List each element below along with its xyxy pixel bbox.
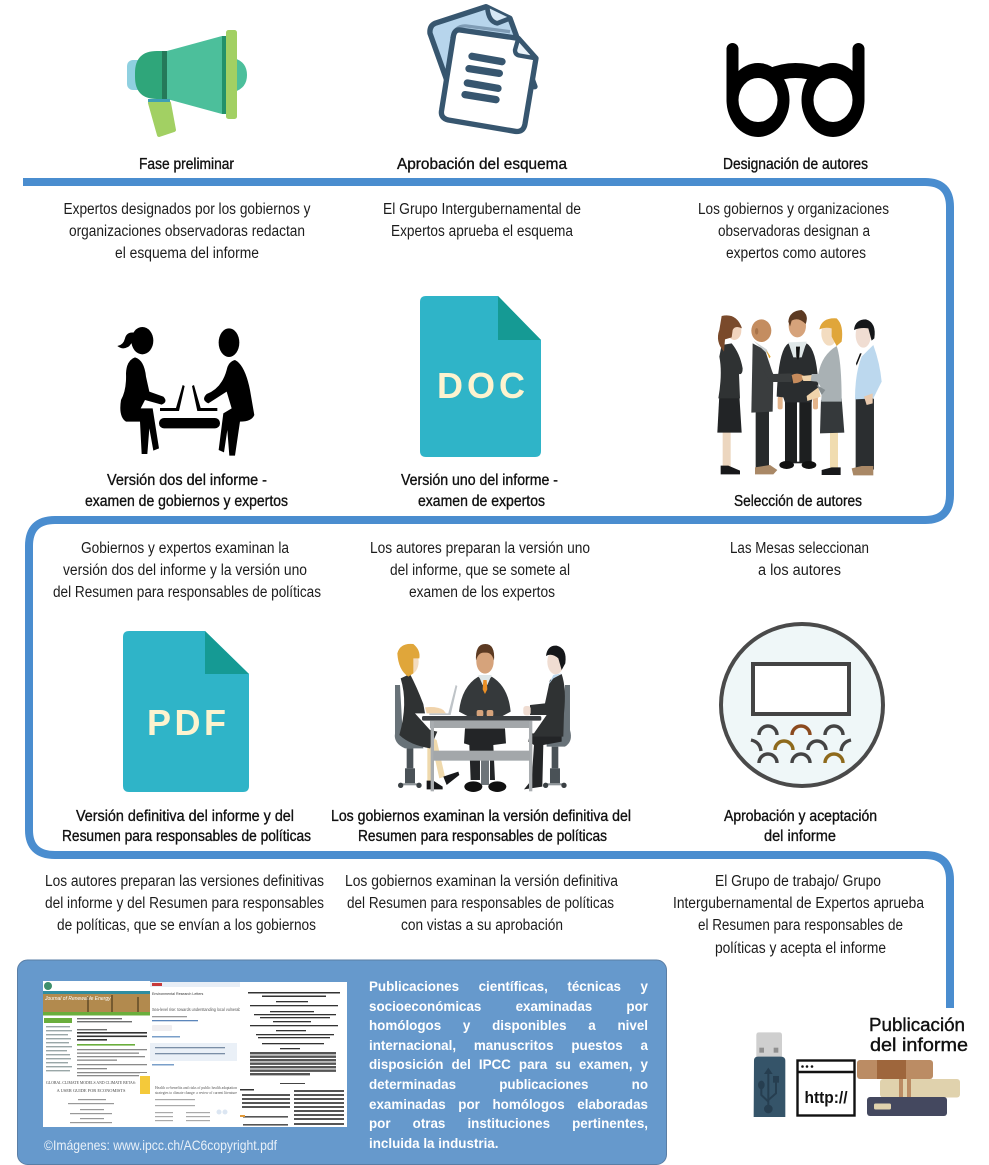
descriptions row 1: expertos como autores <box>726 245 866 262</box>
descriptions row 3: de políticas, que se envían a los gobiernos <box>57 917 316 934</box>
descriptions row 1 <box>64 201 889 262</box>
heading row 2: examen de expertos <box>418 493 545 510</box>
text block: publications description: homólogos y disponibles a nivel <box>369 1018 648 1033</box>
heading row 3: Resumen para responsables de políticas <box>62 828 311 845</box>
heading row 2: examen de gobiernos y expertos <box>85 493 288 510</box>
descriptions row 1: Expertos designados por los gobiernos y <box>64 201 311 218</box>
text block: publications description: socioeconómicas examinadas por <box>369 999 648 1014</box>
descriptions row 2: del Resumen para responsables de políticas <box>53 584 321 601</box>
descriptions row 3: con vistas a su aprobación <box>401 917 563 934</box>
icon: DOC file <box>420 296 541 457</box>
heading row 3: Aprobación y aceptación <box>724 808 877 825</box>
icon: group of authors <box>717 310 882 475</box>
heading: publication of the report: Publicación <box>869 1014 965 1035</box>
image collage: publication screenshots: A USER GUIDE FOR ECONOMISTS <box>57 1088 126 1093</box>
descriptions row 1: Expertos aprueba el esquema <box>391 223 573 240</box>
image collage: publication screenshots: Journal of Renewable Energy <box>44 996 111 1002</box>
descriptions row 1: organizaciones observadoras redactan <box>69 223 305 240</box>
heading row 3 <box>62 808 877 845</box>
image collage: publication screenshots: Sea-level rise: towards understanding local vulnerability <box>152 1007 247 1012</box>
descriptions row 1: El Grupo Intergubernamental de <box>383 201 581 218</box>
heading row 3: del informe <box>764 828 836 845</box>
image collage: publication screenshots: GLOBAL CLIMATE MODELS AND CLIMATE BETAS: <box>46 1080 136 1085</box>
descriptions row 3: Los autores preparan las versiones definitivas <box>45 873 324 890</box>
descriptions row 2: Los autores preparan la versión uno <box>370 540 590 557</box>
icon: USB stick <box>754 1032 785 1117</box>
descriptions row 3 <box>45 873 924 957</box>
descriptions row 3: El Grupo de trabajo/ Grupo <box>715 873 881 890</box>
heading row 3: Los gobiernos examinan la versión definitiva del <box>331 808 631 825</box>
descriptions row 1: observadoras designan a <box>718 223 870 240</box>
descriptions row 2: a los autores <box>758 562 841 579</box>
descriptions row 3: políticas y acepta el informe <box>715 940 886 957</box>
descriptions row 2: examen de los expertos <box>409 584 555 601</box>
image credit: ©Imágenes: www.ipcc.ch/AC6copyright.pdf <box>44 1137 277 1153</box>
icon: two people at laptops <box>117 327 254 456</box>
descriptions row 3: del informe y del Resumen para responsables <box>45 895 324 912</box>
icon: documents <box>430 7 536 131</box>
text block: publications description: internacional, manuscritos puestos a <box>369 1038 648 1053</box>
heading row 2: Versión dos del informe - <box>107 472 267 489</box>
heading: publication of the report <box>869 1014 968 1055</box>
text block: publications description: examinadas por homólogos elaboradas <box>369 1097 648 1112</box>
text block: publications description: incluida la industria. <box>369 1136 498 1151</box>
descriptions row 1: el esquema del informe <box>115 245 259 262</box>
descriptions row 3: el Resumen para responsables de <box>698 917 903 934</box>
icon: megaphone <box>127 30 247 135</box>
icon: PDF file: PDF <box>147 702 226 743</box>
descriptions row 2: versión dos del informe y la versión uno <box>63 562 307 579</box>
heading row 2: Selección de autores <box>734 493 862 510</box>
text block: publications description: disposición del IPCC para su examen, y <box>369 1057 648 1072</box>
heading row 1: Designación de autores <box>723 156 868 173</box>
icon: glasses <box>726 49 864 137</box>
descriptions row 3: Intergubernamental de Expertos aprueba <box>673 895 924 912</box>
heading row 1 <box>139 156 868 173</box>
heading row 3: Resumen para responsables de políticas <box>358 828 607 845</box>
text block: publications description: Publicaciones científicas, técnicas y <box>369 979 648 994</box>
descriptions row 2: Las Mesas seleccionan <box>730 540 869 557</box>
heading row 3: Versión definitiva del informe y del <box>76 808 294 825</box>
icon: stack of books <box>857 1060 960 1116</box>
descriptions row 2 <box>53 540 869 601</box>
image collage: publication screenshots: Environmental Research Letters <box>152 992 204 996</box>
heading: publication of the report: del informe <box>870 1034 968 1055</box>
descriptions row 3: Los gobiernos examinan la versión definitiva <box>345 873 618 890</box>
heading row 2 <box>85 472 862 510</box>
image collage: publication screenshots: strategies to climate change: a review of current literature <box>155 1090 237 1095</box>
descriptions row 2: Gobiernos y expertos examinan la <box>81 540 289 557</box>
icon: DOC file: DOC <box>437 365 525 406</box>
process flow line <box>23 182 950 1008</box>
text block: publications description: determinadas publicaciones no <box>369 1077 648 1092</box>
panel: scientific publications <box>18 960 666 1164</box>
descriptions row 3: del Resumen para responsables de políticas <box>347 895 614 912</box>
heading row 2: Versión uno del informe - <box>401 472 558 489</box>
heading row 1: Fase preliminar <box>139 156 234 173</box>
image collage: publication screenshots <box>43 981 347 1127</box>
descriptions row 2: del informe, que se somete al <box>390 562 570 579</box>
descriptions row 1: Los gobiernos y organizaciones <box>698 201 889 218</box>
icon: browser window <box>798 1060 854 1116</box>
image collage: publication screenshots: Health co-benefits and risks of public health adaptation <box>155 1085 237 1090</box>
text block: publications description: por otras instituciones pertinentes, <box>369 1116 648 1131</box>
text block: publications description <box>369 979 648 1151</box>
heading row 1: Aprobación del esquema <box>397 156 567 173</box>
icon: browser window: http:// <box>804 1088 848 1107</box>
icon: approval room <box>721 624 883 786</box>
icon: government meeting <box>395 644 571 792</box>
icon: PDF file <box>123 631 249 792</box>
